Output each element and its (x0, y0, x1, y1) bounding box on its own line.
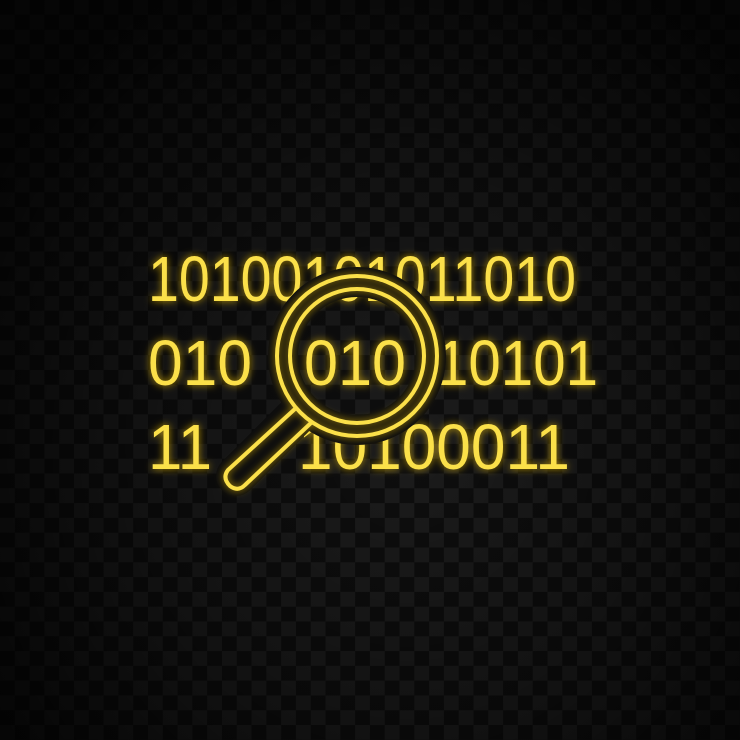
row 2 digits: 10101 (436, 327, 598, 399)
row 2 digits (148, 327, 598, 399)
row 1 digits: 10100101011010 (148, 243, 576, 315)
row 3 digits (148, 411, 570, 483)
magnifier backing (gap) (236, 282, 431, 476)
row 2 digits: 010 (304, 327, 406, 399)
row 3 digits: 11 (148, 411, 212, 483)
row 2 digits: 010 (148, 327, 252, 399)
binary digits text (148, 243, 598, 483)
row 3 digits: 10100011 (298, 411, 570, 483)
icon: magnifying glass (225, 276, 437, 489)
